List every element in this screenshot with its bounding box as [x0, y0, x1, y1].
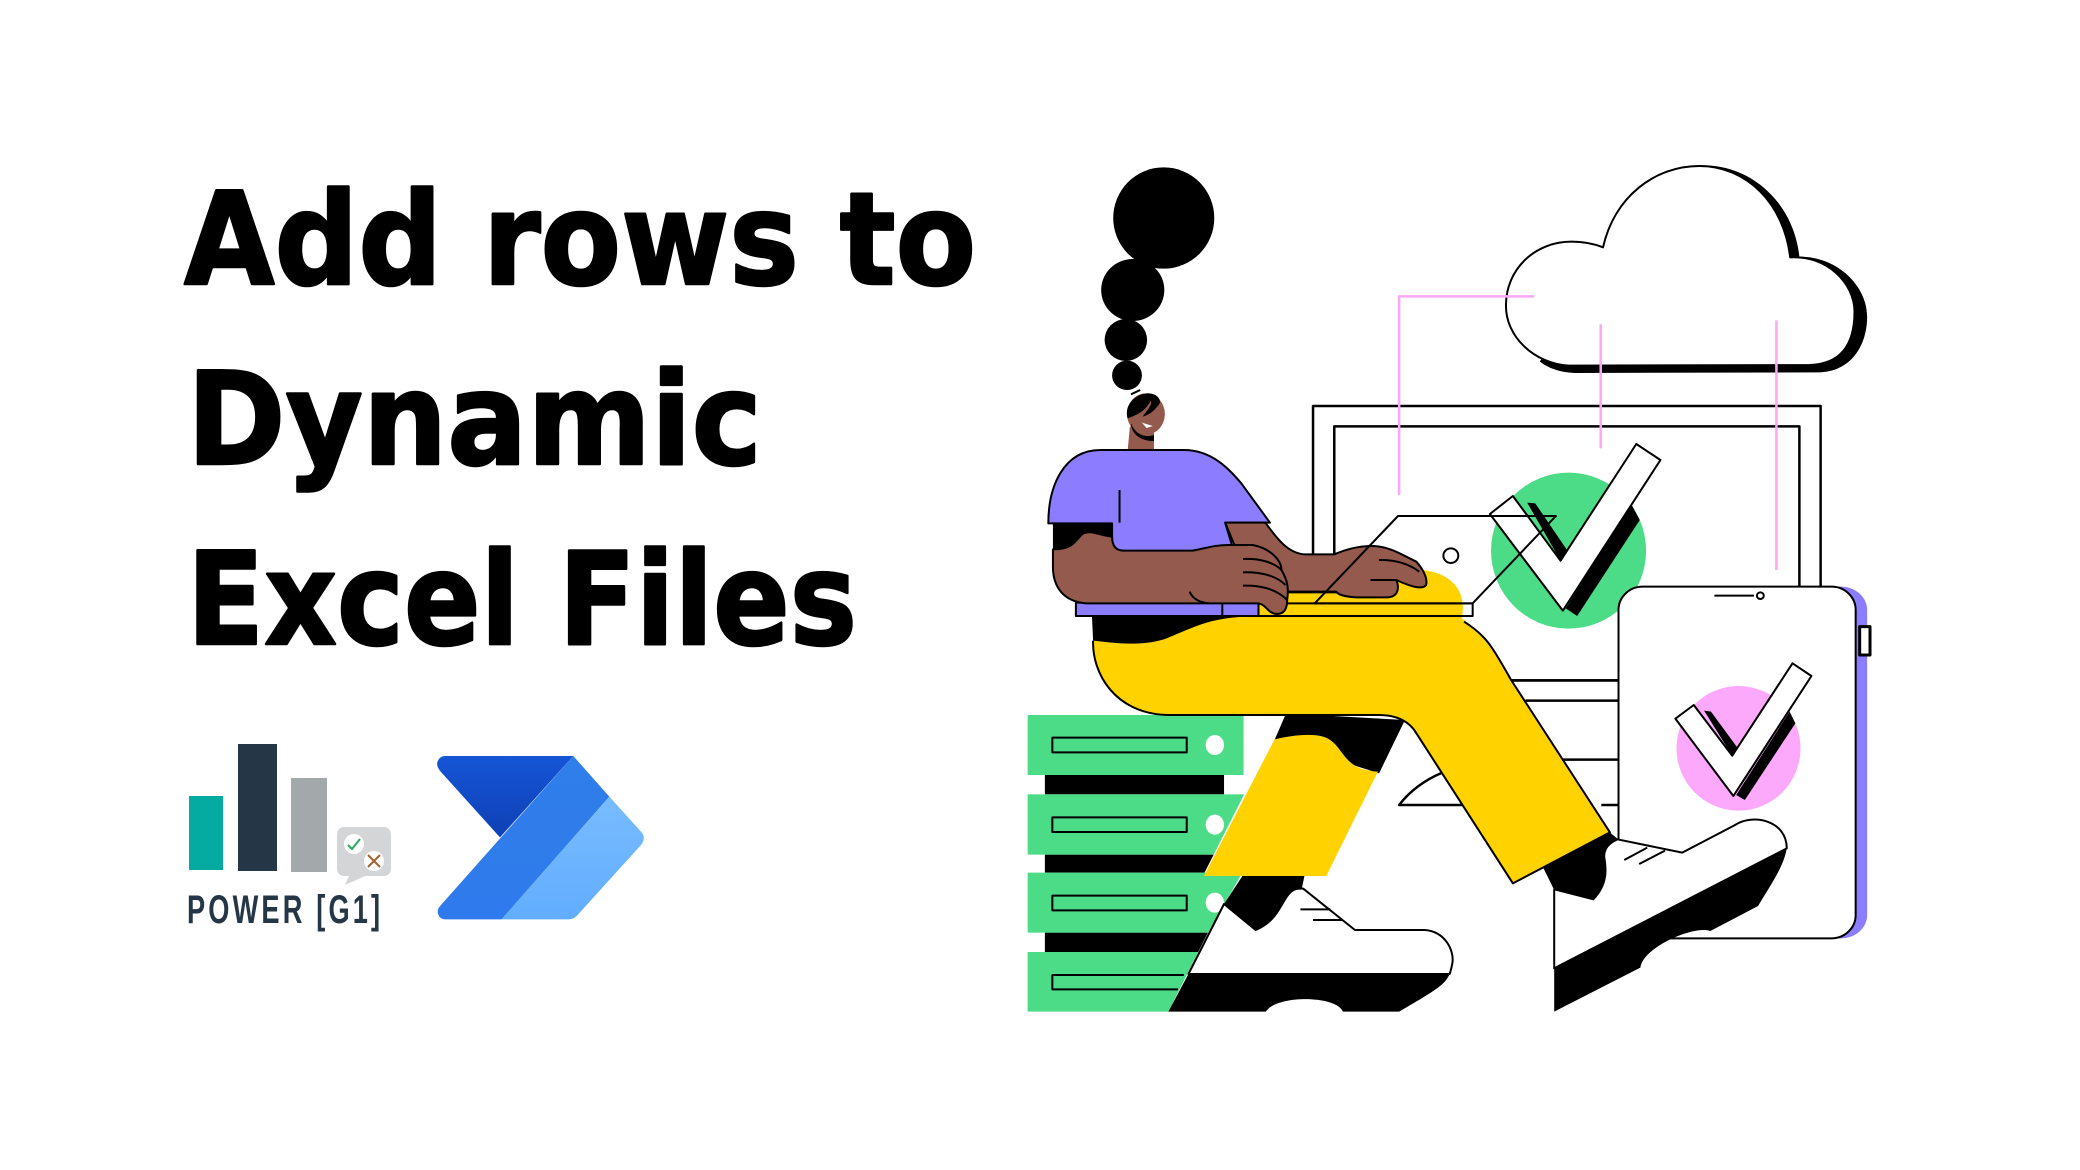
- title: Excel Files: [187, 526, 857, 675]
- server stack: [1028, 715, 1244, 1012]
- tablet check mark: [1675, 663, 1811, 811]
- near arm and hand: [1053, 523, 1288, 614]
- back leg and shoe: [1168, 713, 1453, 1012]
- monitor: [1313, 406, 1821, 805]
- cloud: [1506, 165, 1867, 373]
- front leg and shoe: [1092, 617, 1787, 1012]
- laptop base and yellow knee: [1258, 570, 1473, 620]
- hair: [1101, 167, 1214, 394]
- head: [1127, 393, 1165, 452]
- green circle: [1491, 473, 1646, 629]
- large check mark: [1490, 444, 1660, 616]
- pink connector lines: [1399, 296, 1776, 570]
- logo: Power GI: [187, 744, 391, 932]
- logo: Power Automate: [437, 756, 644, 919]
- far arm and hand: [1225, 523, 1426, 597]
- tablet: [1619, 587, 1870, 938]
- shirt: [1048, 450, 1270, 616]
- title: Add rows to: [184, 166, 976, 315]
- title: [184, 166, 976, 675]
- laptop screen: [1315, 516, 1556, 603]
- title: Dynamic: [187, 346, 762, 495]
- illustration: person working with laptop and devices: [1028, 165, 1870, 1012]
- logo: Power GI: POWER [G1]: [187, 888, 380, 932]
